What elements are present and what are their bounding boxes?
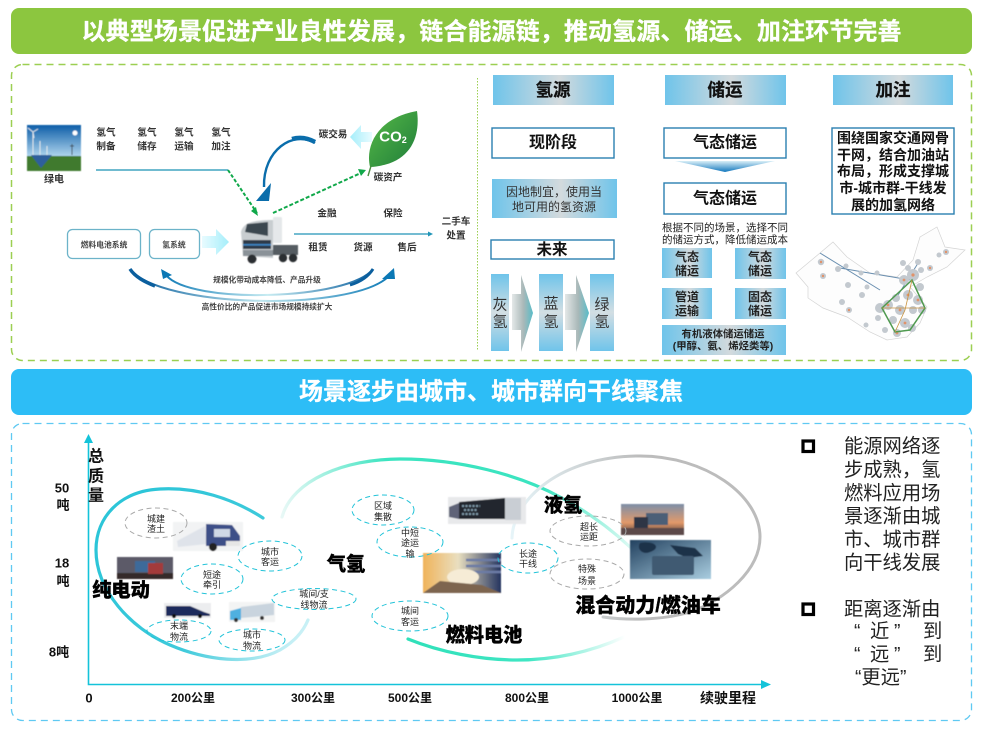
bullet text: network maturing: 能源网络逐 [844, 436, 940, 458]
bullet text: distance increases: 近 [870, 620, 889, 642]
ellipses: scenario tags [125, 495, 626, 651]
tile: gas [662, 248, 712, 278]
box: gas transport [664, 128, 786, 158]
tile: organic liquid: (甲醇、氨、烯烃类等) [673, 340, 773, 352]
box: fuel cell system: 燃料电池系统 [81, 240, 128, 250]
icon: CO2 leaf: 2 [402, 135, 407, 145]
tag: intercity branch logistics: 线物流 [300, 599, 328, 610]
arrow: chevron down [675, 161, 775, 172]
column: hydrogen source [491, 75, 617, 352]
bullet text: network maturing: 燃料应用场 [844, 482, 940, 504]
block: green hydrogen: 绿 [594, 296, 610, 314]
tile: gas right: 气态 [748, 249, 772, 264]
tag: city logistics: 物流 [243, 640, 261, 651]
tile: pipeline: 管道 [675, 289, 699, 304]
header: refuelling: 加注 [876, 80, 910, 100]
box: gas transport: 气态储运 [693, 132, 757, 152]
tag: special scenarios [550, 559, 624, 589]
box: refuelling network text: 围绕国家交通网骨 [837, 130, 949, 146]
box: future [491, 240, 614, 259]
bullet text: network maturing: 步成熟，氢 [844, 459, 940, 481]
x ticks: 0 [85, 690, 93, 706]
box: future: 未来 [536, 240, 568, 258]
tag: construction muck: 城建 [147, 513, 165, 524]
tag: regional distribution: 区域 [374, 500, 392, 511]
y ticks: 50 [55, 480, 69, 496]
tag: long-haul trunk: 长途 [519, 548, 537, 559]
tag: intercity passenger: 城间 [401, 605, 419, 616]
x ticks: 300公里 [291, 691, 335, 705]
caption: market scale expands: 高性价比的产品促进市场规模持续扩大 [202, 302, 333, 312]
block: blue hydrogen: 蓝 [543, 296, 559, 312]
tag: city logistics: 城市 [243, 629, 261, 640]
tag: short-medium haul: 输 [405, 548, 415, 559]
tile: organic liquid [662, 325, 786, 355]
hydrogen chain labels: 氢气 [211, 126, 231, 138]
bullet text: distance increases [803, 598, 942, 688]
hydrogen chain labels: 氢气 [96, 126, 116, 138]
text box: local hydrogen: 因地制宜，使用当 [506, 184, 602, 199]
label: second-hand disposal: 处置 [446, 230, 466, 242]
curve: fuel cell zone bottom [408, 637, 624, 660]
box: refuelling network text: 干网，结合加油站 [837, 147, 949, 163]
header: storage [665, 75, 786, 105]
arrow: carbon asset to truck [273, 169, 366, 213]
bullet text: distance increases: 距离逐渐由 [844, 598, 940, 620]
curve: hybrid and fuel zone [512, 456, 760, 619]
box: hydrogen system: 氢系统 [162, 240, 186, 250]
header: refuelling [833, 75, 953, 105]
tile: solid [735, 288, 786, 319]
x ticks: 1000公里 [612, 691, 662, 705]
arrow: cost reduction loop [161, 269, 373, 295]
x ticks: 800公里 [505, 691, 549, 705]
photo: sunset long-haul truck [621, 504, 684, 535]
arrow: blue to green [565, 275, 589, 352]
x ticks [85, 690, 756, 706]
tag: regional distribution: 集散 [374, 511, 392, 522]
text: transport description: 的储运方式，降低储运成本 [662, 233, 788, 246]
title banner: scenarios: 场景逐步由城市、城市群向干线聚焦 [299, 378, 683, 406]
tile: gas right: 储运 [748, 263, 772, 278]
icon: CO2 leaf [368, 111, 418, 176]
photo: truck with world map [630, 540, 711, 579]
y ticks [49, 480, 70, 660]
photo: red dump truck [117, 557, 173, 579]
tile: solid: 储运 [748, 303, 772, 318]
tag: long-haul trunk: 干线 [519, 558, 537, 569]
axis title: gross mass: 量 [88, 486, 104, 504]
arrow: hydrogen chain to truck [96, 170, 258, 216]
hydrogen chain labels: 加注 [211, 140, 231, 152]
title banner: top: 以典型场景促进产业良性发展，链合能源链，推动氢源、储运、加注环节完善 [82, 18, 902, 46]
tag: city logistics [219, 629, 285, 651]
label: gas hydrogen: 气氢 [327, 552, 365, 576]
block: grey hydrogen: 灰 [492, 296, 508, 314]
service labels: 货源 [353, 242, 373, 254]
service labels [308, 208, 417, 254]
tag: short-medium haul: 中短 [401, 527, 419, 538]
tag: construction muck: 渣土 [147, 523, 165, 534]
tag: short-medium haul [377, 527, 443, 559]
label: battery electric: 纯电动 [92, 578, 150, 602]
bullet text: network maturing [803, 436, 940, 574]
bullet text: network maturing: 市、城市群 [844, 529, 940, 551]
photo: fuel cell truck at dusk [423, 553, 501, 593]
tag: special scenarios: 特殊 [578, 563, 596, 574]
hydrogen chain labels: 氢气 [137, 126, 157, 138]
tile: organic liquid: 有机液体储运储运 [681, 328, 765, 340]
bullet text: distance increases: 远 [870, 644, 889, 666]
tag: city passenger: 城市 [261, 546, 279, 557]
tag: short-haul traction: 短途 [203, 569, 221, 580]
arrow: systems to truck [202, 229, 229, 255]
bullet text: distance increases: “ [854, 644, 860, 666]
bullet text: distance increases: ” [894, 622, 900, 642]
bullet text: distance increases: 到 [923, 620, 942, 642]
bullet text: network maturing: 向干线发展 [844, 552, 940, 574]
arrow: carbon asset to trade [350, 125, 372, 149]
tile: gas right [735, 248, 786, 279]
text: transport description [662, 221, 788, 246]
title banner: scenarios [11, 369, 972, 415]
title banner: top [11, 8, 972, 54]
block: green hydrogen [590, 274, 614, 351]
hydrogen chain labels: 氢气 [174, 126, 194, 138]
tile: solid: 固态 [748, 289, 772, 304]
box: current stage [492, 128, 614, 158]
label: hybrid and fuel vehicles: 混合动力/燃油车 [575, 593, 721, 617]
image: fuel cell truck [241, 217, 298, 264]
box: refuelling network text: 市-城市群-干线发 [839, 180, 947, 196]
tag: short-haul traction [181, 564, 243, 594]
tag: last-mile logistics [147, 620, 211, 642]
tag: ultra-long distance: 超长 [580, 521, 598, 532]
box: current stage: 现阶段 [529, 132, 577, 152]
tag: ultra-long distance [550, 516, 626, 546]
block: grey hydrogen: 氢 [492, 314, 508, 330]
caption: scale reduces cost: 规模化带动成本降低、产品升级 [213, 274, 321, 284]
photo: white heavy truck [173, 522, 243, 551]
image: green power [27, 125, 81, 171]
tag: ultra-long distance: 运距 [580, 532, 598, 542]
tag: construction muck [125, 508, 187, 538]
tag: last-mile logistics: 物流 [170, 631, 188, 642]
map: hydrogen network of China [796, 227, 965, 340]
tag: city passenger [238, 541, 302, 571]
header: hydrogen source [493, 75, 614, 105]
tag: intercity passenger: 客运 [401, 616, 419, 627]
axis title: gross mass: 质 [88, 466, 104, 486]
tag: short-medium haul: 途运 [401, 537, 419, 548]
photo: light blue truck [229, 602, 275, 622]
tag: last-mile logistics: 末端 [170, 620, 188, 631]
hydrogen chain labels: 储存 [137, 140, 157, 152]
bullet text: distance increases: “更远” [855, 668, 906, 688]
block: green hydrogen: 氢 [594, 314, 610, 330]
label: carbon asset: 碳资产 [374, 172, 402, 184]
hydrogen chain labels [96, 126, 231, 152]
box: fuel cell system [68, 230, 140, 258]
box: gas transport second: 气态储运 [693, 188, 757, 208]
bullet text: distance increases: ” [894, 644, 900, 666]
y ticks: 吨 [56, 498, 70, 512]
arrow: grey to blue [512, 275, 533, 352]
tag: intercity branch logistics [272, 588, 356, 610]
block: blue hydrogen: 氢 [543, 314, 559, 330]
text box: local hydrogen [492, 179, 617, 218]
box: refuelling network text [832, 128, 954, 214]
photo: navy van [164, 603, 211, 618]
label: carbon trade: 碳交易 [319, 128, 347, 140]
axis title: gross mass [88, 446, 104, 504]
service labels: 售后 [397, 242, 417, 254]
arrow: truck to second-hand disposal [294, 232, 433, 236]
chart axes [84, 434, 771, 689]
tile: gas: 储运 [675, 263, 699, 278]
bullet text: distance increases: “ [854, 622, 860, 642]
tag: intercity passenger [372, 601, 448, 631]
photo: dark semi truck [448, 497, 526, 524]
text box: local hydrogen: 地可用的氢资源 [512, 199, 596, 214]
tile: gas: 气态 [675, 249, 699, 264]
bullet text: distance increases: 到 [923, 644, 942, 666]
arrow: market expansion loop [130, 268, 395, 301]
arrow: carbon trade to truck [256, 138, 315, 201]
column: storage and transport [662, 75, 788, 355]
label: liquid hydrogen: 液氢 [544, 494, 582, 516]
label: green power: 绿电 [44, 172, 64, 186]
hydrogen chain labels: 运输 [174, 140, 194, 152]
block: grey hydrogen [491, 274, 509, 351]
label: second-hand disposal [442, 216, 471, 242]
panel: industry chain [12, 64, 972, 360]
service labels: 租赁 [308, 242, 328, 254]
service labels: 保险 [383, 208, 403, 220]
x ticks: 200公里 [171, 691, 215, 705]
box: refuelling network text: 展的加氢网络 [851, 197, 935, 213]
tag: short-haul traction: 牵引 [203, 580, 221, 590]
y ticks: 吨 [56, 574, 70, 588]
x ticks: 500公里 [388, 691, 432, 705]
curve: gas hydrogen zone top [282, 459, 630, 547]
tag: city passenger: 客运 [261, 556, 279, 567]
service labels: 金融 [317, 208, 337, 220]
block: blue hydrogen [539, 274, 563, 351]
label: second-hand disposal: 二手车 [442, 216, 471, 228]
tag: regional distribution [352, 495, 414, 525]
tag: special scenarios: 场景 [578, 576, 596, 586]
y ticks: 18 [55, 556, 69, 570]
tag: long-haul trunk [498, 543, 558, 573]
tile: pipeline [662, 288, 712, 319]
label: fuel cell: 燃料电池 [446, 624, 522, 646]
box: gas transport second [664, 183, 786, 214]
bullet text: network maturing: 景逐渐由城 [844, 506, 940, 528]
tag: intercity branch logistics: 城间/支 [299, 588, 329, 599]
tile: pipeline: 运输 [675, 303, 699, 318]
axis title: gross mass: 总 [88, 446, 104, 466]
box: refuelling network text: 布局，形成支撑城 [837, 163, 949, 179]
header: storage: 储运 [708, 80, 743, 100]
header: hydrogen source: 氢源 [536, 80, 571, 100]
column: refuelling [796, 75, 965, 340]
icon: CO2 leaf: CO [379, 128, 402, 146]
x ticks: 续驶里程 [700, 690, 756, 706]
curve: battery electric zone [96, 489, 308, 659]
panel: scenario chart [12, 424, 972, 720]
y ticks: 8吨 [49, 644, 69, 660]
box: hydrogen system [150, 230, 200, 258]
hydrogen chain labels: 制备 [96, 140, 116, 152]
text: transport description: 根据不同的场景，选择不同 [662, 221, 788, 234]
